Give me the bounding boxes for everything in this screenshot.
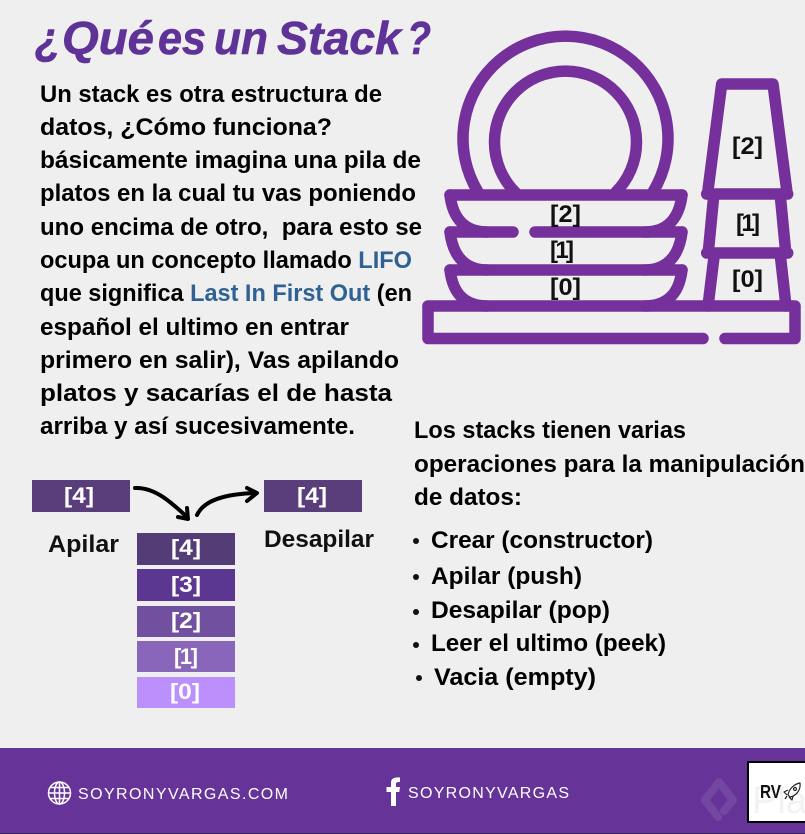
list: stack operations: Desapilar (pop) — [431, 597, 610, 624]
title — [35, 12, 431, 64]
list: stack operations: Apilar (push) — [431, 563, 582, 590]
icon: stacked cups — [707, 84, 788, 306]
text block: operations intro — [414, 417, 805, 511]
arrow: push — [135, 488, 188, 519]
arrow: pop — [197, 488, 257, 515]
title: ¿ — [35, 12, 61, 64]
stack of elements: [1] — [174, 644, 198, 669]
text block: stack explanation: español el ultimo en entrar — [40, 314, 349, 341]
logo — [748, 762, 805, 822]
box: pushed element — [32, 480, 130, 512]
text block: operations intro: de datos: — [414, 484, 522, 511]
box: popped element — [264, 480, 362, 512]
stack of elements: [4] — [171, 535, 201, 560]
text block: operations intro: Los stacks tienen varias — [414, 417, 686, 444]
watermark — [705, 782, 733, 817]
box: pushed element: [4] — [64, 483, 94, 508]
list: stack operations: Leer el ultimo (peek) — [431, 630, 666, 657]
text block: stack explanation: primero en salir), Vas apilando — [40, 347, 399, 374]
list: stack operations: Crear (constructor) — [431, 527, 653, 554]
text block: operations intro: operaciones para la manipulación — [414, 451, 805, 478]
text block: stack explanation: básicamente imagina una pila de — [40, 147, 421, 174]
text block: stack explanation: platos y sacarías el de hasta — [40, 380, 393, 407]
label: Apilar: Apilar — [48, 531, 119, 558]
icon: facebook — [386, 777, 400, 806]
logo: RV — [760, 782, 781, 802]
icon: globe — [48, 782, 70, 804]
website: SOYRONYVARGAS.COM — [78, 786, 288, 803]
list: stack operations — [413, 527, 666, 691]
stack of elements: [2] — [171, 608, 201, 633]
plate labels: [1] — [550, 237, 574, 264]
icon: table base — [428, 306, 795, 338]
box: popped element: [4] — [297, 483, 327, 508]
list: stack operations: Vacia (empty) — [434, 664, 596, 691]
text block: stack explanation — [40, 81, 422, 440]
label: Desapilar: Desapilar — [264, 526, 374, 553]
text block: stack explanation: arriba y así sucesivamente. — [40, 413, 355, 440]
stack of elements: [0] — [170, 679, 200, 704]
title: Qué — [62, 12, 154, 64]
text block: stack explanation: platos en la cual tu vas poniendo — [40, 180, 416, 207]
text block: stack explanation: datos, ¿Cómo funciona? — [40, 114, 332, 141]
title: Stack — [277, 12, 403, 64]
diagram: push and pop operations — [32, 480, 374, 708]
icon: stacked plates — [450, 195, 682, 306]
plate labels: [1] — [736, 210, 760, 237]
text block: stack explanation: uno encima de otro, para esto se — [40, 214, 422, 241]
text block: stack explanation: Un stack es otra estructura de — [40, 81, 382, 108]
facebook handle: SOYRONYVARGAS — [408, 785, 569, 802]
plate labels — [550, 133, 763, 301]
stack of elements: [3] — [171, 572, 201, 597]
title: es — [158, 12, 206, 64]
text block: stack explanation: que significa Last In First Out (en — [40, 280, 412, 307]
icon: rocket — [784, 783, 800, 800]
text block: stack explanation: ocupa un concepto llamado LIFO — [40, 247, 412, 274]
plate labels: [0] — [550, 274, 581, 301]
title: ? — [407, 12, 431, 64]
stack of elements — [137, 533, 235, 708]
plate labels: [2] — [732, 133, 763, 160]
plate labels: [2] — [550, 201, 581, 228]
title: un — [214, 12, 268, 64]
footer — [0, 748, 805, 834]
plate labels: [0] — [732, 266, 763, 293]
icon: upright plate — [463, 36, 668, 192]
illustration: stacked plates and cups — [428, 36, 795, 339]
